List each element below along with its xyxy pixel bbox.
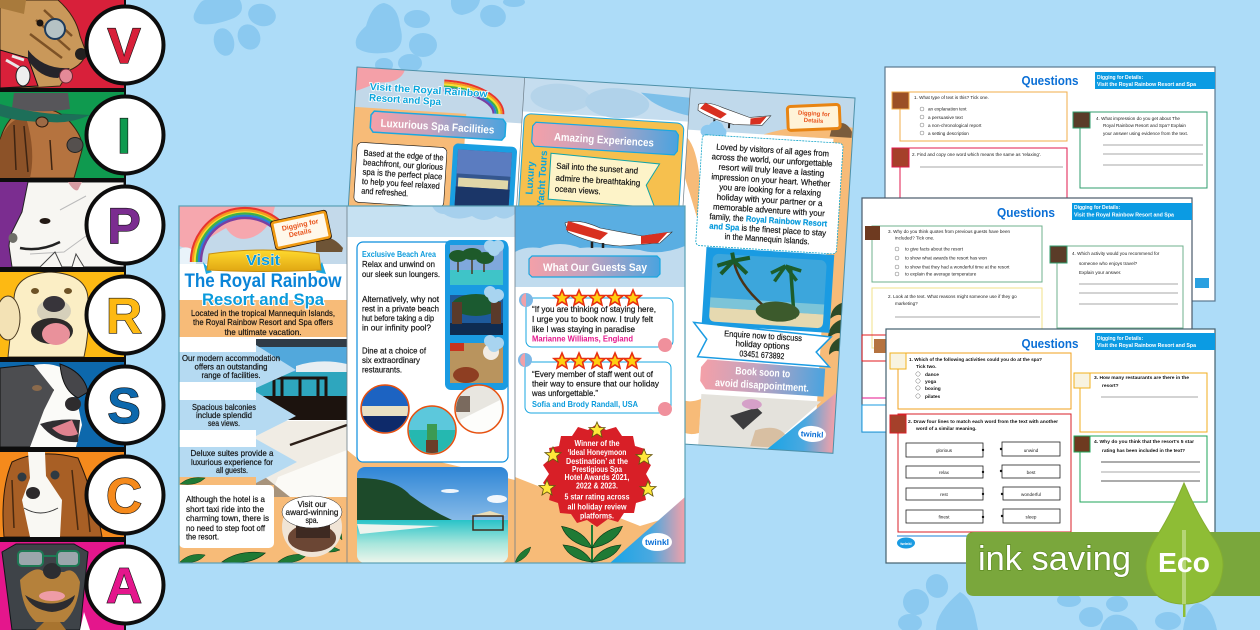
eco leaf [1146, 483, 1223, 617]
beach text: in our infinity pool? [362, 322, 431, 332]
fold lines back [516, 78, 691, 206]
red award badge: Hotel Awards 2021, [564, 473, 630, 482]
worksheet 3 question 2: matching task: glorious [936, 448, 953, 453]
badge C: C [106, 468, 142, 524]
page 1 orange footer [179, 477, 347, 563]
arrow: modern accommodation [179, 345, 296, 388]
red award badge [539, 422, 656, 527]
worksheet 3 footer [897, 536, 1000, 548]
arrow: spacious balconies: Spacious balconies [192, 402, 256, 412]
twinkl logo, back page [798, 425, 827, 443]
worksheet 1 title bar: Digging for Details: [1097, 75, 1143, 81]
red award badge: Destination’ at the [566, 457, 628, 466]
review 2: their way to ensure that our holiday [532, 378, 660, 388]
beach text: Exclusive Beach Area [362, 249, 436, 259]
resort description card: across the world, our unforgettable [711, 151, 833, 169]
pool circle photo [360, 385, 410, 434]
enquire ribbon: Enquire now to discuss [724, 328, 802, 343]
worksheet 2 question 3: 3. Why do you think quotes from previous guests have been [888, 229, 1011, 234]
worksheet 1 question 4: your answer using evidence from the text. [1103, 131, 1188, 136]
beach text: Relax and unwind on [362, 259, 435, 269]
beach text: our sleek sun loungers. [362, 269, 440, 279]
speech bubble: award-winning spa [282, 496, 342, 528]
spa hands photo [282, 497, 342, 557]
worksheet 1 corner mark [1195, 278, 1209, 288]
worksheet 2 question 3: to show that they had a wonderful time at the resort [905, 264, 1010, 270]
worksheet 1 title bar [1095, 72, 1215, 89]
peach swirl on back middle page [686, 399, 701, 434]
worksheet 3 question 2: matching task: word of a similar meaning. [915, 426, 977, 432]
speech bubble: award-winning spa: Visit our [298, 499, 327, 509]
corner gradient [767, 388, 837, 453]
white title area [179, 264, 347, 300]
worksheet 2 question 3: included? Tick one. [895, 236, 934, 240]
hotel text box: charming town, there is [186, 513, 269, 523]
panel: VIPERS dog strip [0, 0, 164, 630]
worksheet 2 question 2: 2. Look at the text. What reasons might someone use if they go [888, 294, 1017, 299]
review 1: “If you are thinking of staying here, [532, 304, 656, 314]
digging for details sign, back page: Details [803, 118, 824, 125]
band I: bloodhound with hat [0, 92, 124, 178]
worksheet 1 question 1 [892, 92, 1067, 141]
worksheet 2 question 4 [1050, 246, 1183, 328]
suite circle photo [455, 385, 505, 435]
ink saving eco banner [966, 483, 1260, 617]
arrow: deluxe suites: Deluxe suites provide a [190, 448, 274, 458]
worksheet 1 question 1: 1. What type of text is this? Tick one. [914, 95, 989, 100]
restaurant food photo [450, 343, 503, 383]
worksheet 3 question 2: matching task: 2. Draw four lines to match each word from the text with another [908, 419, 1058, 425]
twinkl logo [642, 533, 672, 551]
worksheet 3 question 3 [1074, 373, 1207, 432]
hotel text box [179, 485, 274, 548]
spa text box: Based at the edge of the [363, 148, 444, 163]
spa text box: to help you feel relaxed [362, 176, 440, 191]
worksheet 2 question 4: Explain your answer. [1079, 270, 1121, 275]
beach text: hut before taking a dip [362, 313, 434, 323]
badge I: I [117, 108, 131, 164]
intro band [179, 290, 347, 337]
worksheet 2 question 3: to show what awards the resort has won [905, 256, 987, 260]
beach text: Dine at a choice of [362, 346, 427, 356]
enquire ribbon [692, 322, 832, 367]
worksheet 3 question 2: matching task: wonderful [1021, 492, 1041, 497]
review 2: was unforgettable.” [531, 388, 598, 398]
worksheet 3 question 2: matching task: rest [940, 492, 949, 497]
badge stars [539, 422, 656, 496]
badge C [86, 456, 164, 534]
worksheet 2 question 4: someone who enjoys travel? [1079, 261, 1138, 266]
worksheet 2 question 2: marketing? [895, 301, 918, 306]
arrow: modern accommodation: offers an outstanding [194, 362, 268, 372]
back middle page [523, 77, 690, 123]
worksheet 2 title bar [1072, 203, 1192, 220]
band V: terrier with glasses [0, 0, 124, 88]
worksheet 3 question 1 [890, 353, 1071, 409]
worksheet 3 footer: twinkl [900, 541, 912, 546]
panel: back brochure, tilted [335, 67, 855, 453]
enquire ribbon: holiday options [735, 338, 790, 351]
book soon banner: Book soon to [735, 365, 791, 380]
resort description card: and Spa is the finest place to stay [709, 221, 827, 238]
tropical palm photo [702, 247, 834, 333]
spa text box: and refreshed. [361, 186, 409, 198]
book soon banner [700, 359, 825, 397]
band R: golden retriever [0, 272, 124, 357]
badge S: S [107, 378, 141, 434]
spa text box: beachfront, our glorious [363, 157, 443, 172]
worksheet 2 question 3: to give facts about the resort [905, 246, 964, 252]
worksheet 3 question 2: matching task: best [1027, 470, 1036, 475]
worksheet 3 question 2: matching task: unwind [1024, 448, 1039, 453]
beach hut photo [450, 294, 503, 335]
worksheet 1 question 4 [1073, 112, 1207, 188]
review 1: Marianne Williams, England [532, 334, 633, 344]
worksheet 3 question 4: rating has been included in the text? [1102, 448, 1185, 454]
palm pool photo [449, 245, 503, 285]
back left page header [348, 68, 524, 206]
panel: front brochure [179, 206, 685, 563]
badge A [86, 546, 164, 624]
strip black backing [0, 0, 126, 630]
cloud tabs [484, 240, 504, 352]
photo: deck over the sea [256, 339, 347, 420]
book soon banner: avoid disappointment. [715, 377, 809, 395]
fold lines [347, 206, 515, 563]
band S: border collie [0, 362, 124, 447]
red photo frame on back middle page [652, 354, 676, 415]
badge S [86, 366, 164, 444]
hotel text box: the resort. [186, 532, 219, 542]
arrow: spacious balconies: include splendid [196, 410, 252, 420]
speech bubble: award-winning spa: award-winning [286, 507, 339, 517]
ink saving label: ink saving [978, 540, 1131, 578]
worksheet 1 question 2: 2. Find and copy one word which means the same as ‘relaxing’. [912, 152, 1041, 157]
worksheet 1 heading: Questions [1022, 73, 1078, 88]
worksheet 3 question 2: matching task: sleep [1026, 514, 1037, 520]
worksheet 3 question 2: matching task: relax [939, 470, 950, 475]
red award badge: 2022 & 2023. [576, 482, 618, 490]
hotel text box: no need to step foot off [186, 523, 266, 533]
amazing experiences card: Yacht Tours [536, 150, 550, 207]
resort description card: memorable adventure with your [713, 201, 825, 218]
worksheet 3 title bar: Visit the Royal Rainbow Resort and Spa [1097, 343, 1196, 349]
intro band: Resort and Spa [202, 290, 325, 309]
worksheet 3 question 4 [1074, 436, 1207, 502]
hotel text box: Although the hotel is a [186, 494, 265, 504]
intro band: the ultimate vacation. [224, 327, 302, 337]
worksheet 3 question 1: dance [925, 372, 939, 378]
worksheet 3 question 1: 1. Which of the following activities could you do at the spa? [909, 357, 1042, 363]
badge P: P [107, 198, 141, 254]
amazing experiences card [518, 113, 684, 206]
review 1: I urge you to book now. I truly felt [532, 314, 654, 324]
seaplane, back page [697, 102, 771, 131]
front brochure outline [179, 206, 685, 563]
badge V: V [107, 18, 141, 74]
badge R [86, 276, 164, 354]
digging for details sign: Details [288, 228, 312, 239]
speech bubble: award-winning spa: spa. [306, 515, 318, 525]
worksheet 1 question 4: Royal Rainbow Resort and Spa? Explain [1103, 123, 1186, 128]
arrow: modern accommodation: range of facilities. [202, 370, 260, 380]
seaplane [565, 221, 672, 248]
worksheet 2 question 3: to explain the average temperature [905, 272, 977, 276]
title: The Royal Rainbow [184, 271, 342, 292]
cocktail circle photo [407, 406, 457, 456]
resort description card: family, the Royal Rainbow Resort [709, 211, 828, 228]
arrow: spacious balconies [179, 392, 296, 436]
worksheet 3 question 4: 4. Why do you think that the resort's 5 star [1094, 439, 1194, 445]
beach text: restaurants. [362, 364, 402, 374]
red award badge: ‘Ideal Honeymoon [568, 448, 627, 457]
worksheet 1 question 1: a setting description [928, 131, 969, 136]
back right page header [685, 88, 854, 409]
resort description card: you are looking for a relaxing [719, 182, 822, 198]
worksheet 1 question 1: a persuasive text [928, 115, 963, 120]
band P: white samoyed [0, 182, 124, 267]
worksheet 2 title bar: Visit the Royal Rainbow Resort and Spa [1074, 212, 1174, 218]
worksheet 2 question 2 [872, 288, 1042, 348]
worksheet 2 question 4: 4. Which activity would you recommend for [1072, 251, 1160, 256]
worksheet 1 title bar: Visit the Royal Rainbow Resort and Spa [1097, 82, 1196, 88]
red award badge: 5 star rating across [564, 492, 630, 502]
spa text box [354, 142, 447, 208]
beach area card [357, 240, 508, 462]
band C: cavalier spaniel [0, 452, 124, 537]
review 2: Sofia and Brody Randall, USA [532, 399, 638, 409]
red award badge: Prestigious Spa [572, 465, 622, 474]
arrow: deluxe suites: all guests. [216, 465, 248, 475]
worksheet 2 title bar: Digging for Details: [1074, 205, 1120, 211]
palm frond on back page edge [828, 302, 842, 355]
amazing experiences card: Luxury [524, 161, 537, 195]
page 3 orange footer [515, 477, 685, 563]
review 1: like I was staying in paradise [532, 324, 635, 334]
back title: Visit the Royal Rainbow [369, 82, 488, 100]
amazing experiences card: Amazing Experiences [554, 131, 654, 150]
worksheet 1 question 1: an explanation text [928, 106, 967, 112]
band A: rottweiler in glasses [0, 542, 124, 630]
visit ribbon [203, 250, 326, 274]
intro band: Located in the tropical Mannequin Islands, [191, 308, 335, 318]
palm leaves at foot of page 3 [512, 525, 626, 563]
review 1 [519, 290, 673, 352]
amazing experiences card: Sail into the sunset and [556, 161, 639, 176]
red award badge: Winner of the [574, 439, 620, 448]
worksheet 1 question 4: 4. What impression do you get about The [1096, 116, 1180, 121]
digging for details sign, back page [786, 101, 854, 138]
heading: what our guests say: What Our Guests Say [543, 262, 648, 274]
corner gradient [610, 497, 685, 563]
digging for details sign: Digging for [281, 218, 320, 233]
photo: white suite [256, 421, 347, 497]
worksheet 3 question 1: boxing [925, 386, 941, 392]
red award badge: all holiday review [568, 502, 627, 512]
twinkl logo, back page: twinkl [800, 429, 824, 440]
back title [368, 82, 489, 108]
beach text: six extraordinary [362, 355, 421, 365]
amazing experiences card: admire the breathtaking [555, 173, 641, 188]
worksheet 1 [885, 67, 1215, 301]
worksheet 3 title bar [1095, 333, 1215, 350]
worksheet 1 question 2 [892, 148, 1067, 208]
worksheet 3 question 2: matching task: finest [939, 514, 950, 520]
beach text: rest in a private beach [362, 304, 439, 314]
review 2: “Every member of staff went out of [532, 369, 654, 379]
worksheet 3 question 1: yoga [925, 380, 937, 385]
enquire ribbon: 03451 673892 [739, 348, 785, 361]
worksheet 3 heading: Questions [1022, 336, 1078, 351]
resort description card [696, 135, 843, 254]
badge I [86, 96, 164, 174]
worksheet 3 [886, 329, 1215, 563]
arrow: spacious balconies: sea views. [208, 418, 240, 428]
lagoon beach photo [357, 467, 508, 563]
badge V [86, 6, 164, 84]
spa orchid photo [698, 394, 821, 452]
beach text [362, 249, 440, 374]
heading: Luxurious Spa Facilities: Luxurious Spa Facilities [380, 118, 495, 137]
heading: Luxurious Spa Facilities [370, 111, 506, 140]
arrow: modern accommodation: Our modern accommodation [182, 353, 280, 363]
page 2 orange area [347, 450, 515, 563]
worksheet 2 question 3 [865, 226, 1042, 282]
worksheet 3 title bar: Digging for Details: [1097, 336, 1143, 342]
heading: what our guests say [529, 256, 660, 277]
worksheet 2 [862, 198, 1192, 432]
beach text: Alternatively, why not [362, 294, 440, 304]
cloud icon [700, 121, 726, 136]
worksheet 3 question 1: Tick two. [916, 364, 936, 370]
badge P [86, 186, 164, 264]
page 2 header [347, 206, 515, 237]
resort description card: Loved by visitors of all ages from [716, 141, 829, 158]
worksheet 3 question 3: 3. How many restaurants are there in the [1094, 375, 1189, 381]
worksheet 3 question 2: matching task [890, 414, 1071, 532]
worksheet 2 heading: Questions [997, 205, 1055, 220]
resort description card: holiday with your partner or a [716, 192, 823, 208]
resort description card: resort will truly leave a lasting [718, 162, 825, 178]
amazing experiences card: ocean views. [555, 184, 601, 196]
digging for details sign [270, 209, 343, 252]
hotel text box: short taxi ride into the [186, 504, 264, 514]
blue photo column [445, 240, 508, 390]
badge A: A [106, 558, 142, 614]
worksheet 3 question 3: resort? [1102, 383, 1119, 389]
rainbow [191, 208, 286, 262]
review 2 [518, 353, 672, 416]
red award badge: platforms. [580, 512, 614, 520]
worksheet 3 question 1: pilates [925, 394, 941, 400]
badge R: R [106, 288, 142, 344]
digging for details sign, back page: Digging for [798, 110, 831, 118]
spa text box: spa is the perfect place [362, 167, 443, 182]
back title: Resort and Spa [369, 93, 442, 108]
worksheet 2 left margin marks [862, 335, 886, 432]
resort description card: impression on your heart. Whether [711, 171, 831, 189]
spa photo [450, 143, 517, 206]
twinkl logo: twinkl [645, 537, 669, 547]
arrow: deluxe suites: luxurious experience for [191, 457, 273, 467]
visit ribbon: Visit [246, 253, 280, 269]
intro band: the Royal Rainbow Resort and Spa offers [193, 317, 333, 327]
worksheet 1 question 1: a non-chronological report [928, 123, 982, 128]
page 3 header [515, 206, 685, 287]
arrow: deluxe suites [179, 439, 297, 483]
eco leaf: Eco [1158, 547, 1210, 578]
resort description card: in the Mannequin Islands. [724, 231, 810, 246]
page 1: cover header [179, 206, 347, 264]
